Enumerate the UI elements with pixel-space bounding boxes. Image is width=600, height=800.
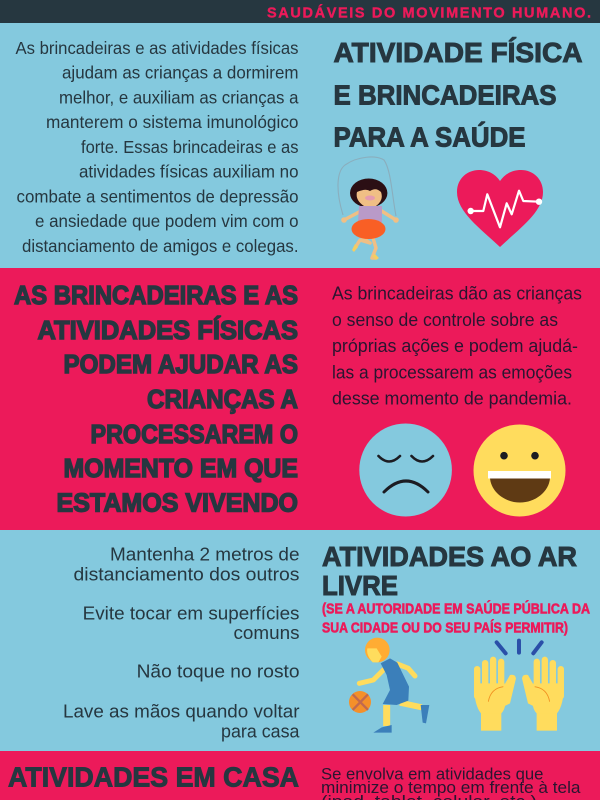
body text: sense of control: desse momento de pandemia. — [332, 388, 572, 408]
body text: safety tips: comuns — [234, 622, 300, 643]
body text: screen time: Se envolva em atividades que — [321, 764, 543, 783]
body text: screen time — [321, 764, 581, 800]
body text: safety tips: Não toque no rosto — [137, 661, 300, 682]
body text: safety tips: distanciamento dos outros — [74, 564, 300, 585]
heading: play helps process the moment: ESTAMOS VIVENDO — [56, 488, 298, 518]
body text: sense of control — [332, 283, 582, 408]
body text: sense of control: las a processarem as emoções — [332, 363, 572, 383]
heading: play helps process the moment: CRIANÇAS A — [147, 384, 298, 414]
icon: raised hands — [474, 641, 564, 731]
icon: happy face — [474, 424, 566, 516]
heading: physical activity: ATIVIDADE FÍSICA — [334, 37, 582, 68]
icon: sad face — [359, 424, 452, 516]
heading: outdoor activities: LIVRE — [322, 570, 398, 601]
body text: benefits — [16, 38, 299, 256]
heading: physical activity — [334, 37, 582, 153]
body text: safety tips: Lave as mãos quando voltar — [63, 700, 300, 721]
panel: top banner — [0, 0, 600, 23]
body text: benefits: forte. Essas brincadeiras e as — [81, 137, 299, 157]
heading: physical activity: PARA A SAÚDE — [334, 122, 526, 153]
heading: play helps process the moment: AS BRINCADEIRAS E AS — [14, 280, 298, 310]
left hand — [474, 657, 516, 731]
body text: sense of control: As brincadeiras dão as crianças — [332, 283, 582, 303]
heading: activities at home: ATIVIDADES EM CASA — [8, 762, 299, 793]
heading: play helps process the moment: MOMENTO EM QUE — [64, 453, 298, 483]
body text: benefits: melhor, e auxiliam as crianças a — [59, 88, 299, 108]
body text: sense of control: próprias ações e podem ajudá- — [332, 336, 578, 356]
heading: outdoor activities: ATIVIDADES AO AR — [322, 541, 577, 572]
panel: outdoor activities — [0, 530, 600, 751]
body text: benefits: atividades físicas auxiliam no — [79, 162, 298, 182]
body text: sense of control: o senso de controle sobre as — [332, 310, 558, 330]
panel: physical activity for health — [0, 23, 600, 268]
body text: safety tips: Mantenha 2 metros de — [110, 544, 300, 565]
heading: physical activity: E BRINCADEIRAS — [334, 80, 556, 110]
body text: benefits: As brincadeiras e as atividades físicas — [16, 38, 299, 58]
icon: boy dribbling basketball — [349, 638, 429, 733]
banner text: SAUDÁVEIS DO MOVIMENTO HUMANO. — [267, 4, 591, 22]
icon: girl jumping rope — [338, 157, 399, 260]
icon: heart with pulse — [457, 170, 543, 247]
right hand — [522, 657, 564, 731]
heading: play helps process the moment: ATIVIDADES FÍSICAS — [38, 315, 298, 345]
body text: benefits: e ansiedade que podem vim com o — [35, 211, 298, 231]
body text: safety tips: para casa — [221, 720, 300, 741]
note: if the health authority allows — [322, 599, 590, 637]
body text: safety tips — [63, 544, 300, 741]
heading: play helps process the moment: PROCESSAREM O — [90, 419, 298, 449]
panel: activities at home — [0, 751, 600, 800]
body text: benefits: distanciamento de amigos e colegas. — [22, 236, 298, 256]
heading: play helps process the moment: PODEM AJUDAR AS — [64, 349, 298, 379]
body text: safety tips: Evite tocar em superfícies — [83, 602, 300, 623]
body text: benefits: combate a sentimentos de depressão — [16, 186, 298, 206]
body text: screen time: minimize o tempo em frente à tela — [321, 778, 581, 797]
body text: benefits: manterem o sistema imunológico — [46, 112, 298, 132]
heading: outdoor activities — [322, 541, 577, 601]
heading: play helps process the moment — [14, 280, 298, 518]
panel: processing emotions — [0, 268, 600, 530]
body text: benefits: ajudam as crianças a dormirem — [62, 63, 298, 83]
